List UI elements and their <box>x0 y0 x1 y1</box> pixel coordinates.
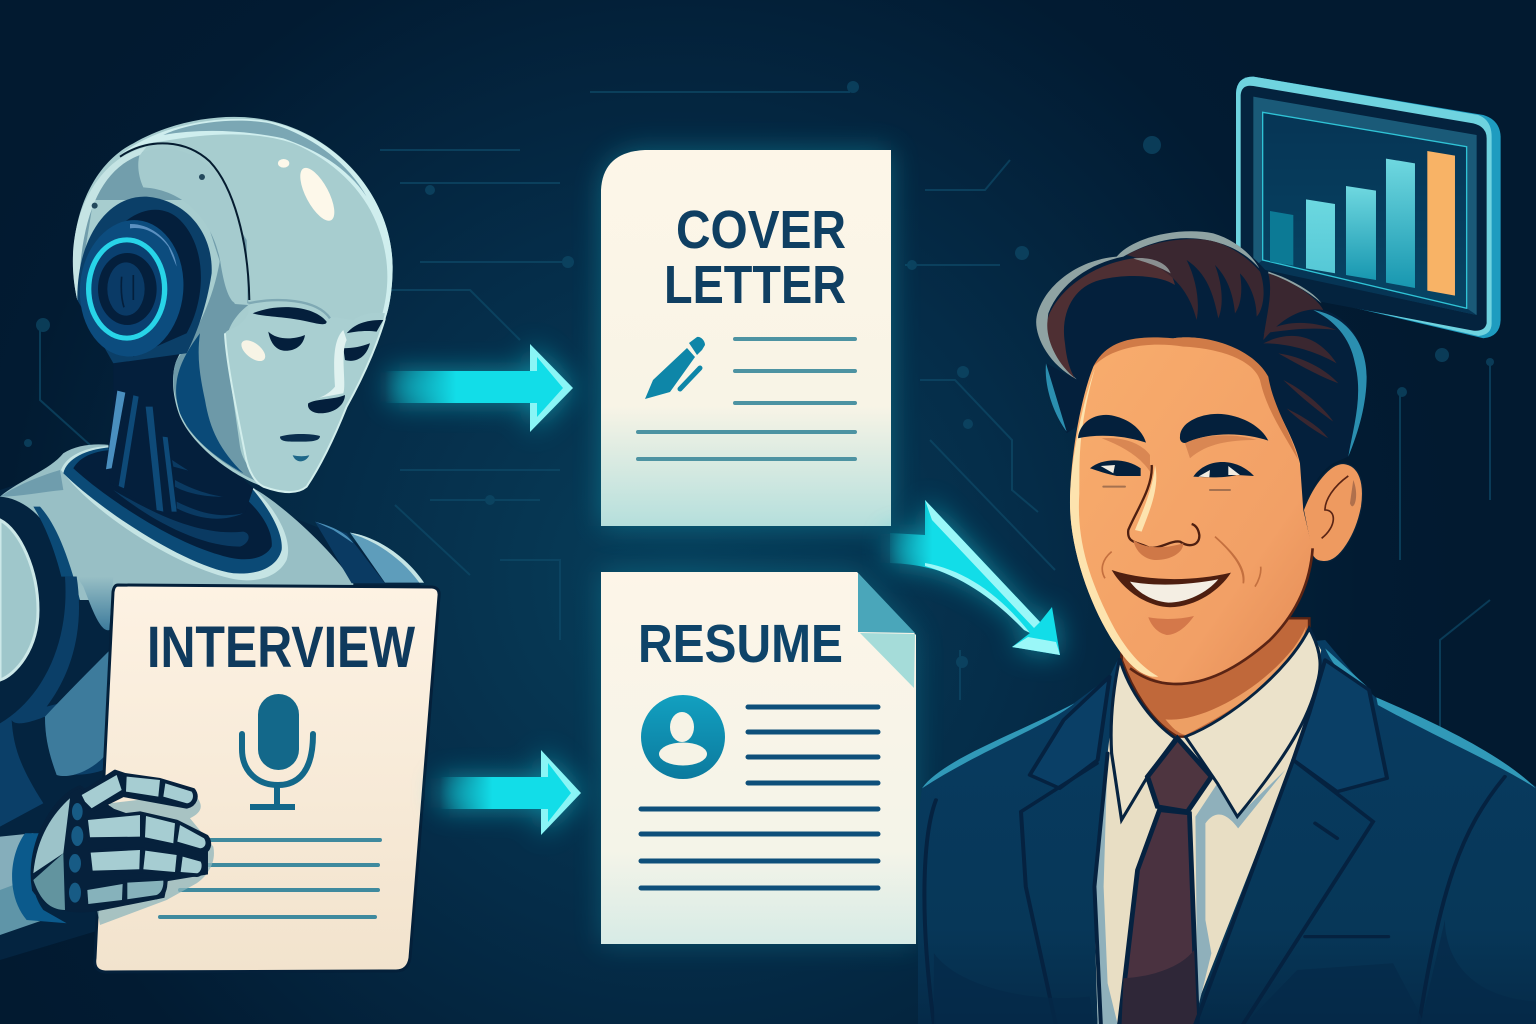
eye shadows <box>1102 435 1257 472</box>
lower lip shadow <box>1148 616 1194 635</box>
eyebrows <box>1078 415 1146 443</box>
highlights <box>294 163 341 226</box>
shirt <box>1094 630 1321 1024</box>
icon: avatar <box>641 695 725 779</box>
monitor with bar chart <box>1236 77 1501 338</box>
interview sheet <box>95 585 439 972</box>
cover letter title: COVER <box>676 200 846 260</box>
mouth <box>1112 570 1231 607</box>
tie <box>1120 810 1197 1024</box>
document: cover letter <box>601 150 891 526</box>
palm <box>32 787 207 911</box>
candidate <box>918 231 1536 1024</box>
robot head <box>73 117 393 492</box>
suit lower shadows <box>934 920 1536 1024</box>
circuit pattern <box>24 81 1494 740</box>
face <box>1070 337 1313 683</box>
robot hand <box>32 772 214 925</box>
robot torso and arm <box>0 444 425 960</box>
robot <box>0 117 425 960</box>
interview title: INTERVIEW <box>147 615 415 680</box>
arrow: documents to candidate <box>890 500 1060 655</box>
hair back <box>1036 231 1367 510</box>
head <box>1036 231 1367 684</box>
monitor frame <box>1236 77 1501 338</box>
cover text lines <box>638 339 855 459</box>
cover sheet glow <box>601 150 891 526</box>
hand shadow <box>95 793 214 925</box>
arrow: robot to resume <box>440 750 581 835</box>
neck <box>1122 618 1309 737</box>
document: resume <box>601 572 916 944</box>
document: cover letter: LETTER <box>664 255 846 315</box>
nose <box>1128 465 1199 548</box>
earphone <box>77 197 212 363</box>
icon: microphone <box>242 694 313 807</box>
jaw line <box>1130 548 1313 684</box>
page fold <box>858 573 915 633</box>
hair rim <box>1036 231 1259 379</box>
eyes <box>1090 460 1141 476</box>
resume sheet glow <box>601 572 916 944</box>
suit edge highlights <box>922 648 1536 788</box>
monitor screen <box>1253 97 1477 315</box>
resume title: RESUME <box>638 614 843 674</box>
mouth <box>280 434 320 442</box>
icon: pen <box>645 337 705 399</box>
face plate <box>225 301 385 492</box>
collar <box>1111 658 1175 820</box>
forehead shade <box>1093 337 1298 460</box>
lower head shading <box>173 260 287 491</box>
arrow: robot to cover letter <box>385 344 573 432</box>
smile lines <box>1102 537 1261 587</box>
head dome <box>73 117 393 492</box>
ear <box>1303 463 1363 562</box>
shirt shadow strips <box>1094 753 1118 1024</box>
dome shine <box>120 119 393 320</box>
cover sheet <box>601 150 891 526</box>
side shell <box>73 152 248 303</box>
face light edge <box>1070 368 1158 677</box>
interview text lines <box>160 840 380 917</box>
suit <box>918 618 1536 1024</box>
lapels <box>1030 677 1110 788</box>
suit seam lines <box>924 753 1505 1024</box>
brow and eyes <box>253 307 327 324</box>
fingers <box>82 772 209 905</box>
hair highlights <box>1047 258 1175 378</box>
resume text lines <box>641 707 878 888</box>
nose and nose shine <box>317 330 347 398</box>
robot neck <box>106 333 253 519</box>
document: interview <box>95 585 439 972</box>
bars <box>1270 151 1455 296</box>
resume sheet <box>601 572 916 944</box>
